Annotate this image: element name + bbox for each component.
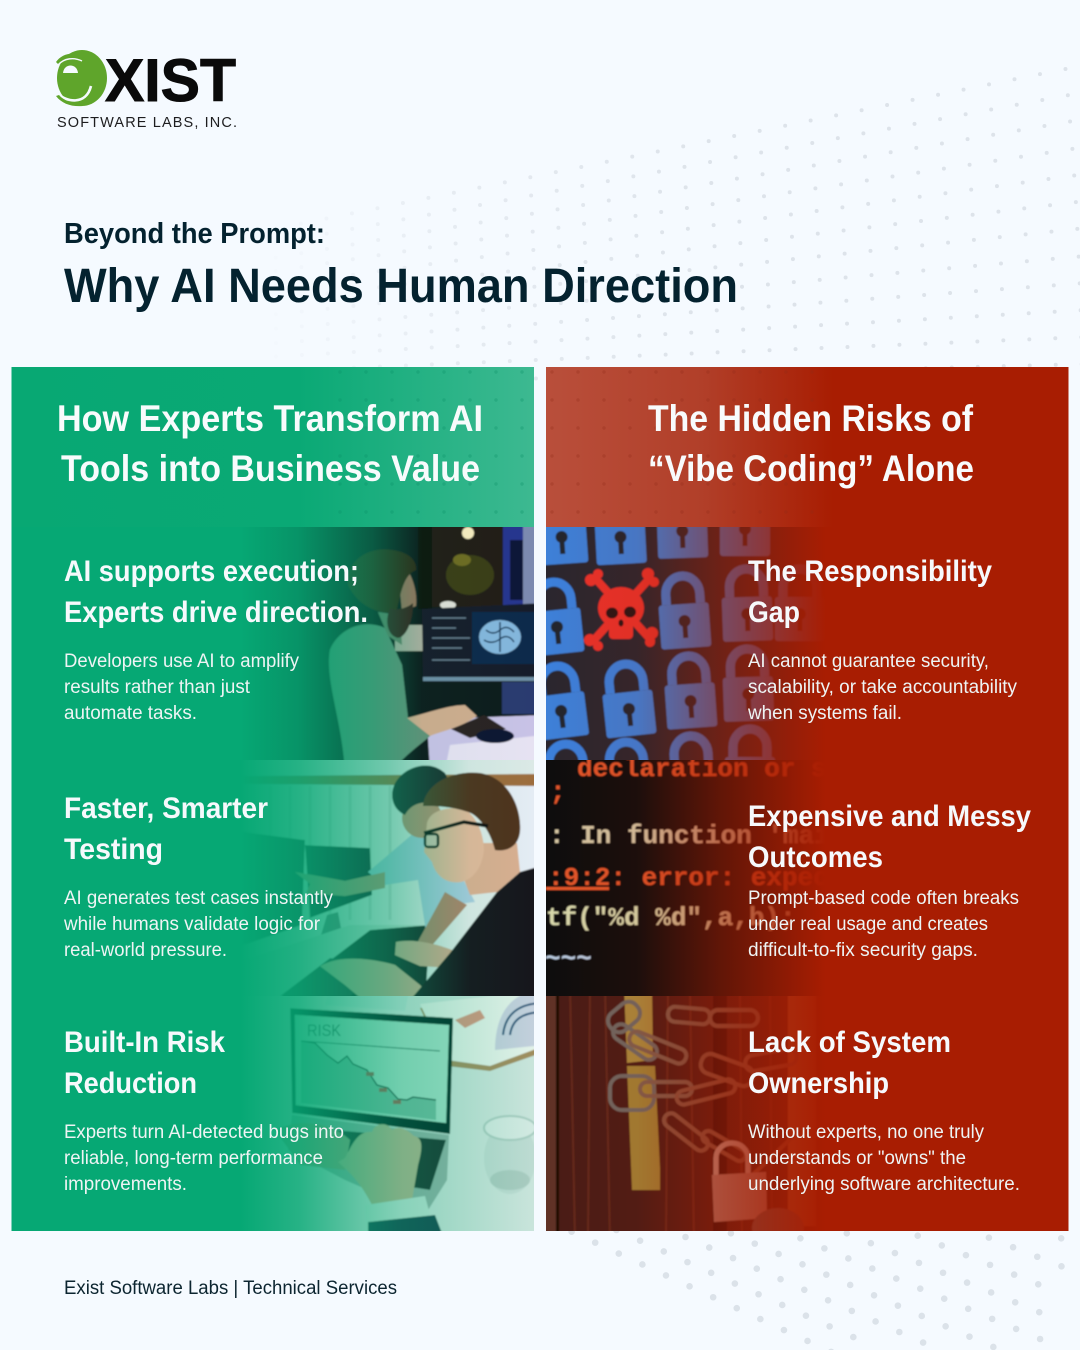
image: code compile error on screen: declaration or st — [577, 754, 842, 784]
item: built-in risk reduction: Built-In Risk — [64, 1026, 225, 1059]
image: code compile error on screen: : In function 'main': — [549, 821, 877, 851]
item: lack of system ownership: Lack of System — [748, 1026, 951, 1059]
item: responsibility gap: AI cannot guarantee security, — [748, 651, 989, 672]
image: chained and padlocked door — [546, 996, 806, 1231]
item: faster smarter testing: real-world pressure. — [64, 940, 227, 961]
panel header: risks: The Hidden Risks of — [648, 398, 974, 439]
image: code compile error on screen: ~~~ — [545, 944, 592, 974]
item: AI supports execution: Developers use AI to amplify — [64, 651, 299, 672]
item: built-in risk reduction: reliable, long-term performance — [64, 1148, 323, 1169]
item: responsibility gap: The Responsibility — [748, 555, 992, 588]
item: expensive and messy outcomes — [748, 800, 1031, 961]
image: code compile error on screen: tf("%d %d",a,b); — [546, 903, 796, 933]
item: faster smarter testing: while humans validate logic for — [63, 914, 321, 935]
panel: hidden risks of vibe coding — [527, 367, 1068, 1248]
icon: green e mark — [56, 50, 107, 106]
item: faster smarter testing: AI generates test cases instantly — [64, 888, 333, 909]
main title: Why AI Needs Human Direction — [64, 260, 738, 313]
image: hand on laptop showing risk chart — [254, 996, 534, 1231]
item: lack of system ownership — [748, 1026, 1020, 1195]
item: built-in risk reduction: Experts turn AI-detected bugs into — [64, 1122, 344, 1143]
item: lack of system ownership: underlying software architecture. — [748, 1174, 1020, 1195]
item: lack of system ownership: Without experts, no one truly — [748, 1122, 984, 1143]
panel header: risks: “Vibe Coding” Alone — [648, 448, 974, 489]
item: AI supports execution: results rather than just — [64, 677, 251, 698]
item: AI supports execution — [64, 555, 368, 724]
item: AI supports execution: automate tasks. — [64, 703, 197, 724]
icon: red skull and crossbones — [584, 568, 659, 651]
image: code compile error on screen: ; — [550, 777, 566, 807]
panel header: risks — [546, 367, 1068, 527]
item: responsibility gap: when systems fail. — [747, 703, 902, 724]
item: built-in risk reduction: improvements. — [64, 1174, 187, 1195]
panel header: experts: Tools into Business Value — [61, 448, 480, 489]
image: two developers reviewing code — [255, 760, 534, 996]
item: responsibility gap: Gap — [748, 596, 800, 629]
footer: Exist Software Labs | Technical Services — [64, 1278, 397, 1299]
logo tagline: SOFTWARE LABS, INC. — [57, 115, 237, 131]
item: lack of system ownership: understands or "owns" the — [748, 1148, 966, 1169]
item: expensive and messy outcomes: Outcomes — [748, 841, 883, 874]
item: faster smarter testing: Faster, Smarter — [64, 792, 268, 825]
item: faster smarter testing — [63, 792, 333, 961]
item: built-in risk reduction: Reduction — [64, 1067, 197, 1100]
item: expensive and messy outcomes: difficult-to-fix security gaps. — [748, 940, 978, 961]
panel: how experts transform AI tools — [12, 367, 544, 1241]
item: AI supports execution: AI supports execution; — [64, 555, 359, 588]
subtitle: Beyond the Prompt: — [64, 218, 325, 250]
image: padlocks and red skull — [546, 527, 817, 760]
item: responsibility gap: scalability, or take accountability — [748, 677, 1017, 698]
panel header: experts — [12, 367, 534, 527]
panel header: experts: How Experts Transform AI — [57, 398, 483, 439]
item: expensive and messy outcomes: under real usage and creates — [748, 914, 988, 935]
item: expensive and messy outcomes: Prompt-based code often breaks — [748, 888, 1019, 909]
item: expensive and messy outcomes: Expensive and Messy — [748, 800, 1031, 833]
logo wordmark: XIST — [105, 47, 236, 114]
image: code compile error on screen: :9:2: error: expected — [548, 863, 876, 893]
item: faster smarter testing: Testing — [64, 833, 163, 866]
item: responsibility gap — [747, 555, 1017, 724]
logo: Exist Software Labs — [56, 47, 237, 131]
item: AI supports execution: Experts drive direction. — [64, 596, 368, 629]
image: code compile error on screen — [546, 760, 814, 996]
item: lack of system ownership: Ownership — [748, 1067, 889, 1100]
image: hand on laptop showing risk chart: RISK — [307, 1021, 342, 1040]
item: built-in risk reduction — [64, 1026, 344, 1195]
title block — [64, 218, 738, 313]
image: developer at monitor with brain visual — [263, 527, 534, 760]
